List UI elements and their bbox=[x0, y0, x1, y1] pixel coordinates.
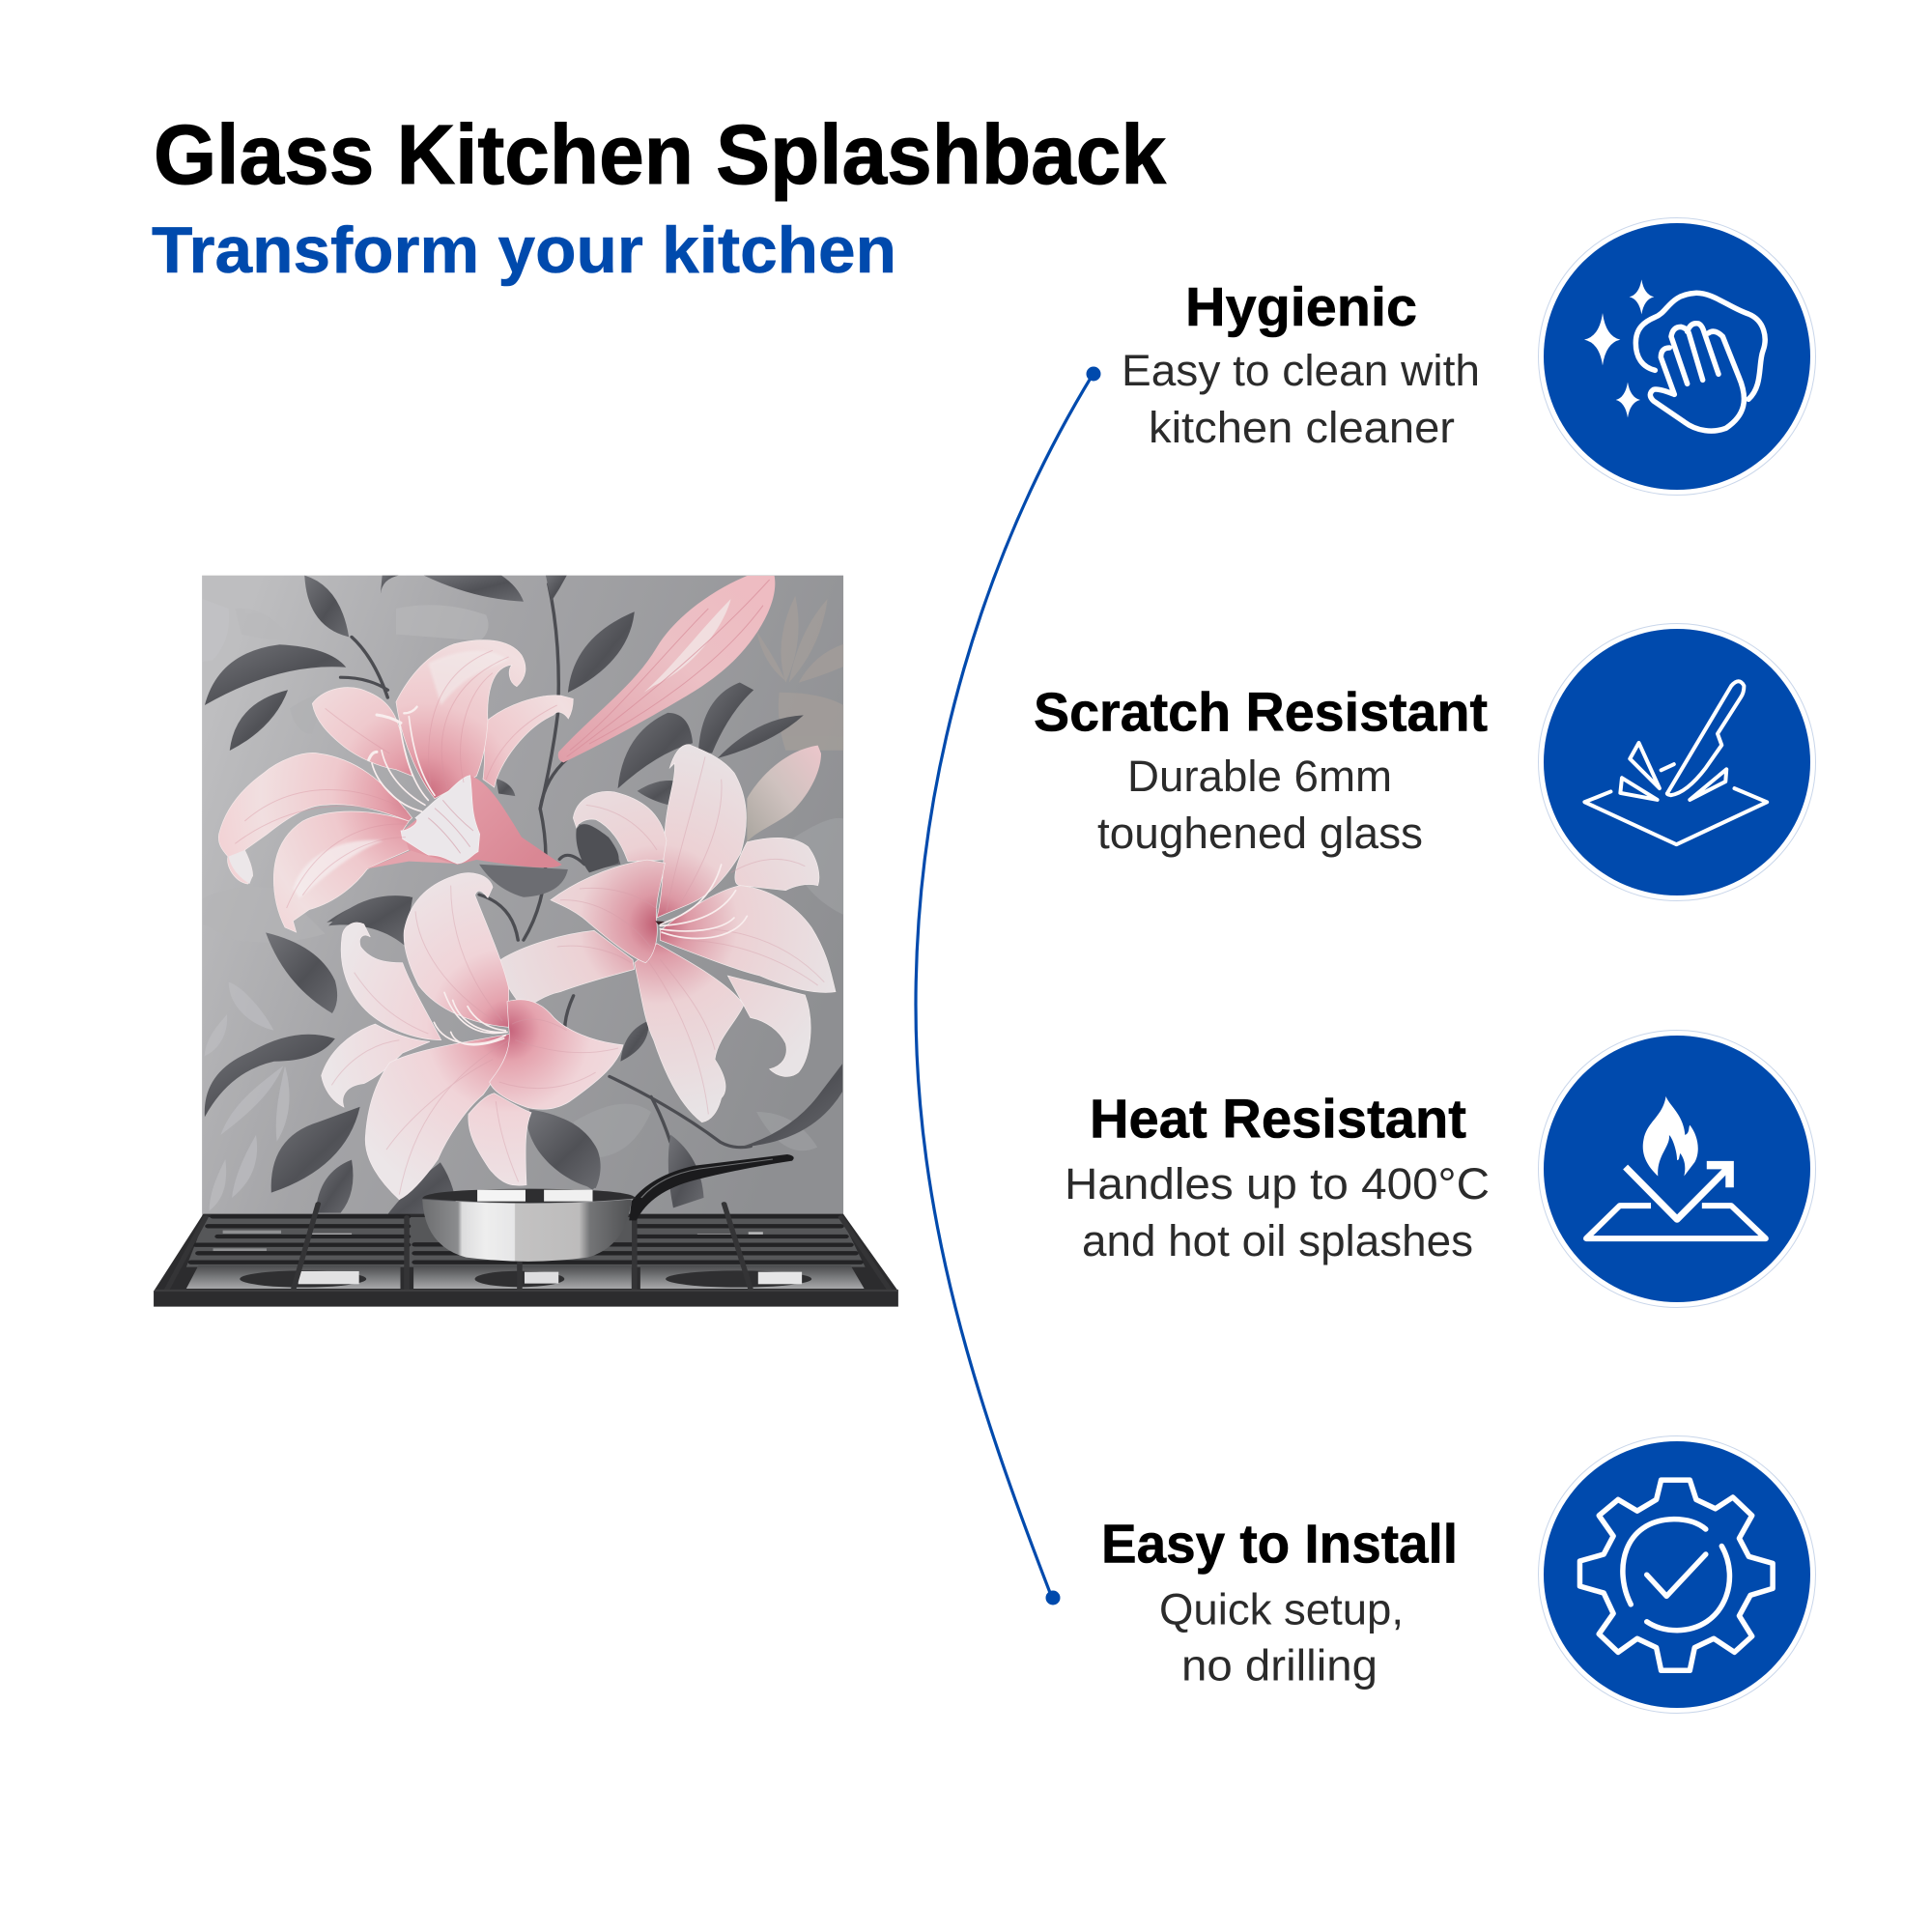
heading: Heat Resistant bbox=[1090, 1088, 1466, 1150]
front burners bbox=[240, 1270, 811, 1288]
description: no drilling bbox=[1181, 1640, 1378, 1690]
heading: Scratch Resistant bbox=[1034, 682, 1488, 744]
petal veins bbox=[235, 650, 557, 908]
infographic canvas bbox=[152, 122, 1816, 1714]
description: Handles up to 400°C bbox=[1065, 1159, 1490, 1208]
feature: Heat Resistant bbox=[1065, 1088, 1490, 1265]
description bbox=[1159, 1584, 1404, 1690]
cross bars bbox=[167, 1204, 890, 1290]
description: and hot oil splashes bbox=[1082, 1216, 1473, 1265]
product image: floral glass splashback above gas hob bbox=[154, 576, 898, 1307]
pale background foliage, left bbox=[422, 605, 489, 639]
description bbox=[1122, 346, 1480, 452]
icon: knife scratching glass bbox=[1538, 624, 1816, 900]
description: Easy to clean with bbox=[1122, 346, 1480, 395]
gas hob bbox=[154, 1154, 898, 1307]
petals bbox=[500, 745, 836, 1122]
icon: flame heat resistance bbox=[1538, 1030, 1816, 1308]
flower bud: right bbox=[747, 746, 821, 842]
connector bottom dot bbox=[1045, 1590, 1061, 1605]
trumpet underside sliver bbox=[367, 850, 454, 869]
icon: gear with check mark bbox=[1538, 1435, 1816, 1714]
title: Glass Kitchen Splashback bbox=[154, 108, 1167, 202]
grate rods bbox=[191, 1216, 861, 1263]
curved connector line bbox=[916, 367, 1101, 1605]
trumpet petal bbox=[403, 776, 562, 867]
heading: Easy to Install bbox=[1101, 1513, 1458, 1575]
petals bbox=[322, 873, 623, 1200]
description bbox=[1097, 752, 1423, 858]
feature: Easy to Install bbox=[1101, 1513, 1458, 1690]
pale background foliage, lower left bbox=[205, 982, 290, 1210]
frying pan bbox=[422, 1154, 794, 1262]
description bbox=[1065, 1159, 1490, 1265]
dark leaves bbox=[205, 576, 842, 1218]
back burner highlights bbox=[213, 1231, 763, 1251]
description: Quick setup, bbox=[1159, 1584, 1404, 1634]
stems bbox=[341, 583, 751, 1148]
stamens bbox=[434, 992, 507, 1045]
feature: Scratch Resistant bbox=[1034, 682, 1488, 858]
petal veins bbox=[557, 756, 824, 1114]
petal veins bbox=[331, 886, 618, 1195]
stamens bbox=[660, 865, 747, 938]
description: kitchen cleaner bbox=[1149, 403, 1455, 452]
icon: hand wiping with sparkles bbox=[1538, 218, 1816, 495]
lily: bottom bbox=[322, 873, 623, 1200]
panel: lily artwork bbox=[202, 576, 843, 1219]
leaves around lily bbox=[328, 895, 601, 1188]
lily: right bbox=[500, 745, 836, 1122]
leaf behind lily bbox=[576, 824, 619, 872]
subtitle: Transform your kitchen bbox=[152, 213, 896, 287]
stamens bbox=[369, 707, 435, 811]
petals bbox=[218, 640, 573, 932]
heading: Hygienic bbox=[1185, 276, 1417, 338]
burner wells bbox=[186, 1265, 865, 1289]
beige background foliage, upper right bbox=[756, 596, 843, 751]
connector top dot bbox=[1086, 367, 1101, 381]
lily: upper left bbox=[218, 640, 573, 932]
description: Durable 6mm bbox=[1127, 752, 1392, 801]
description: toughened glass bbox=[1097, 809, 1423, 858]
hob back area bbox=[186, 1217, 866, 1267]
flower bud: top bbox=[558, 576, 775, 762]
feature: Hygienic bbox=[1122, 276, 1480, 452]
